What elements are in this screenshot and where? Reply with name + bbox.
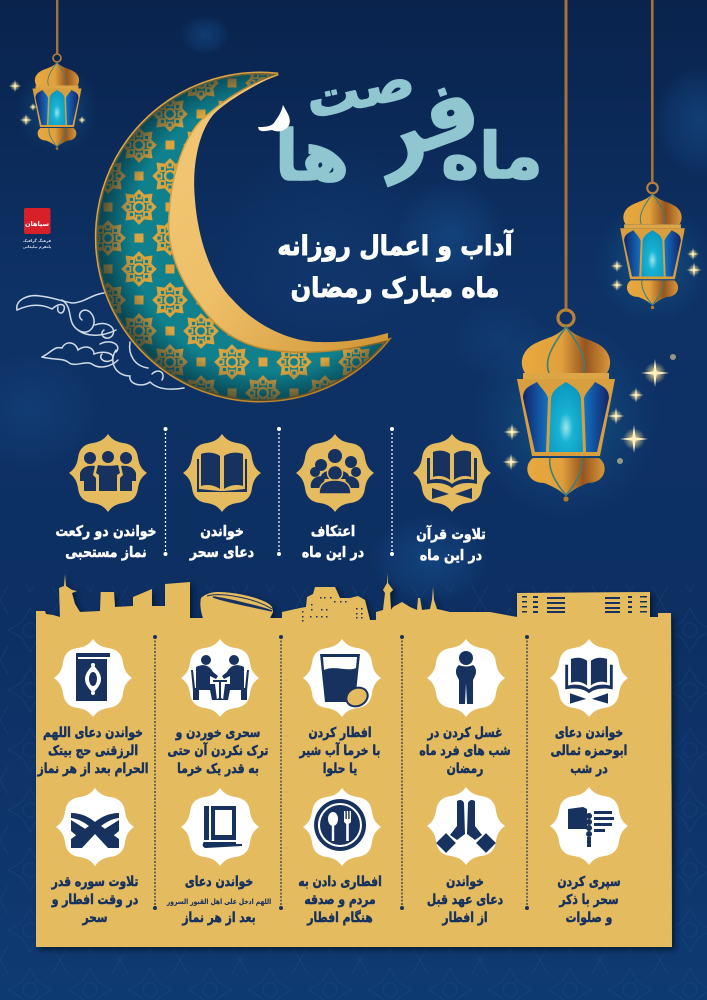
title <box>275 47 543 197</box>
item: giving iftar: هنگام افطار <box>306 909 373 926</box>
clouds <box>17 293 184 389</box>
item: ghusl <box>419 639 511 776</box>
item: sahari: به قدر یک خرما <box>177 761 259 776</box>
sparkles around large lantern <box>503 354 676 470</box>
item: tilawat <box>413 434 491 564</box>
title: صت <box>300 47 420 131</box>
item: iftar <box>299 639 381 776</box>
item: hajj prayer: الحرام بعد از هر نماز <box>37 761 148 777</box>
stadium roof line <box>207 595 272 611</box>
item: abu hamza prayer <box>550 639 628 776</box>
subtitle <box>277 228 514 304</box>
item: iftar: با خرما آب شیر <box>299 742 380 758</box>
item: surah qadr: تلاوت سوره قدر <box>51 874 138 889</box>
item: sahari: سحری خوردن و <box>175 725 260 740</box>
item: dhikr: سپری کردن <box>557 874 621 889</box>
item: sahar prayer: دعای سحر <box>189 544 254 561</box>
item: qabr prayer: اللهم ادخل علی اهل القبور السرور <box>166 897 271 906</box>
title: فر <box>354 56 492 187</box>
item: abu hamza prayer: ابوحمزه ثمالی <box>551 743 627 758</box>
item: ahd prayer <box>427 787 505 925</box>
item: ahd prayer: از افطار <box>441 910 488 925</box>
item: dhikr: سحر با ذکر <box>558 892 619 907</box>
title: ها <box>275 115 349 197</box>
item: hajj prayer <box>37 639 148 777</box>
moon lattice <box>96 73 388 401</box>
item: surah qadr <box>51 788 138 925</box>
item: sahari <box>168 639 268 776</box>
subtitle: آداب و اعمال روزانه <box>277 228 514 262</box>
skyline windows <box>302 596 647 622</box>
lantern: small right <box>593 0 707 324</box>
top row of four deeds <box>55 434 491 564</box>
item: two rakat <box>55 434 157 561</box>
crescent moon <box>96 73 388 401</box>
item: dhikr: و صلوات <box>566 910 612 925</box>
item: itikaf: اعتکاف <box>311 523 355 540</box>
bird <box>258 105 290 131</box>
skyline panel <box>36 573 672 947</box>
item: ghusl: غسل کردن در <box>427 725 503 740</box>
logo: پلتفرم تبلیغاتی <box>23 244 52 249</box>
item: sahari: ترک نکردن آن حتی <box>168 742 268 758</box>
item: iftar: یا حلوا <box>323 761 357 776</box>
item: itikaf: در این ماه <box>302 544 364 561</box>
item: two rakat: نماز مستحبی <box>65 544 147 561</box>
title: ماه <box>441 120 543 194</box>
item: giving iftar: مردم و صدقه <box>304 892 376 908</box>
panel dividers <box>153 635 529 910</box>
panel items <box>37 639 628 926</box>
item: ahd prayer: دعای عهد قبل <box>427 892 503 907</box>
item: qabr prayer <box>166 788 271 925</box>
item: hajj prayer: الرزقنی حج بیتک <box>48 743 138 758</box>
item: sahar prayer <box>183 434 261 561</box>
moon gold band <box>169 74 388 351</box>
item: tilawat: تلاوت قرآن <box>416 525 486 543</box>
item: iftar: افطار کردن <box>308 725 372 740</box>
item: itikaf <box>296 434 374 561</box>
logo: فرهنگ گرافیک <box>23 238 52 243</box>
item: sahar prayer: خواندن <box>200 523 244 540</box>
item: giving iftar <box>298 788 382 926</box>
lantern: large right <box>471 0 661 520</box>
item: surah qadr: سحر <box>82 910 108 925</box>
item: abu hamza prayer: در شب <box>570 761 608 776</box>
logo <box>23 208 52 249</box>
item: ghusl: شب های فرد ماه <box>419 743 511 758</box>
subtitle: ماه مبارک رمضان <box>291 273 499 304</box>
item: two rakat: خواندن دو رکعت <box>55 523 157 540</box>
item: surah qadr: در وقت افطار و <box>51 892 138 907</box>
item: tilawat: در این ماه <box>420 547 482 564</box>
lantern: small left <box>9 0 99 155</box>
logo: سپاهان <box>25 220 49 228</box>
item: qabr prayer: خواندن دعای <box>185 874 253 889</box>
item: hajj prayer: خواندن دعای اللهم <box>43 725 143 740</box>
item: qabr prayer: بعد از هر نماز <box>181 910 256 925</box>
item: ghusl: رمضان <box>447 761 483 776</box>
item: giving iftar: افطاری دادن به <box>298 874 382 889</box>
item: dhikr <box>550 787 628 925</box>
item: abu hamza prayer: خواندن دعای <box>555 725 623 740</box>
item: ahd prayer: خواندن <box>446 874 484 889</box>
